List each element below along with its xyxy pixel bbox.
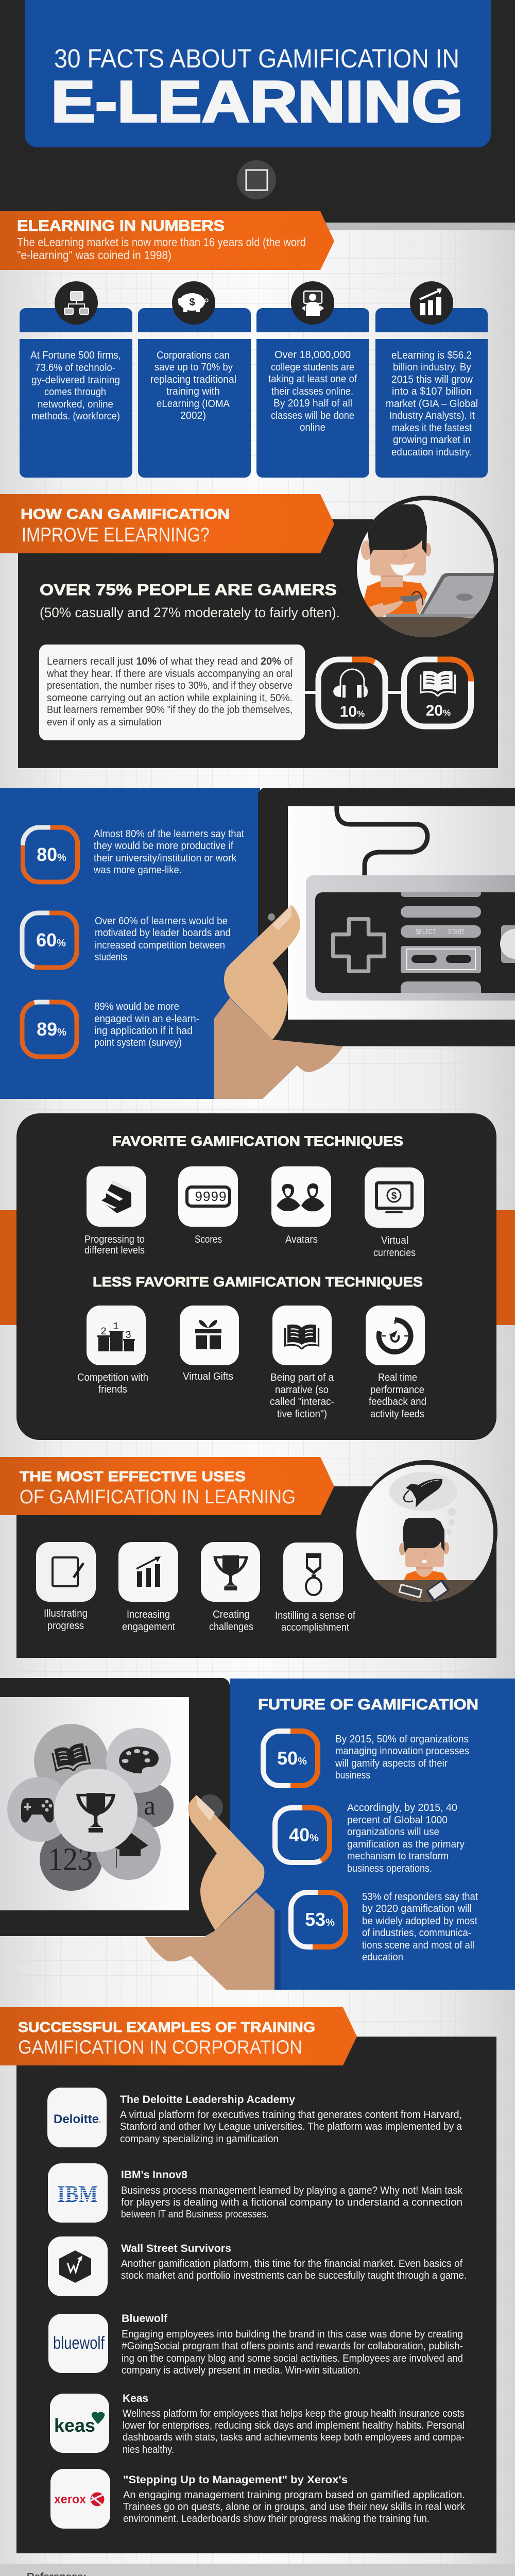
ring: 10 percent headphones: 10% [340, 703, 365, 720]
card: corporations save: training with [166, 386, 220, 397]
use: illustrating progress: progress [47, 1620, 84, 1632]
text: 89 percent [94, 1001, 199, 1048]
technique: competition: 3 [125, 1330, 131, 1342]
example: Xerox: An engaging management training program based on gamified application. [123, 2489, 465, 2501]
card: market size: eLearning is $56.2 [391, 350, 472, 361]
example: Bluewolf: Engaging employees into building the brand in this case was done by creating [122, 2329, 463, 2340]
heading: less favorite techniques: LESS FAVORITE GAMIFICATION TECHNIQUES [93, 1274, 423, 1290]
card: college students: By 2019 half of all [273, 398, 352, 409]
text: 80 percent: they would be more productive if [94, 840, 233, 852]
bubble: book [34, 1724, 108, 1798]
technique: narrative: called "interac- [270, 1396, 334, 1408]
example: Keas: lower for enterprises, reducing sick days and implement healthy habits. Personal [123, 2420, 465, 2431]
text: 80 percent [93, 828, 244, 876]
card: corporations save: Corporations can [157, 350, 230, 361]
card: college students: online [300, 422, 325, 433]
text: 40 percent: business operations. [347, 1863, 432, 1874]
technique: virtual currencies: currencies [373, 1247, 416, 1259]
example: Keas: nies healthy. [123, 2444, 174, 2455]
card: corporations save: save up to 70% by [154, 362, 233, 373]
orange band behind techniques panel [0, 1210, 515, 1325]
card: college students: taking at least one of [268, 374, 357, 385]
example: Xerox: Trainees go on quests, alone or in groups, and use their new skills in real work [123, 2501, 466, 2513]
banner: most effective uses [0, 1457, 334, 1515]
heading: future: FUTURE OF GAMIFICATION [258, 1697, 478, 1713]
ring: 20 percent book: 20% [426, 702, 451, 719]
stat: over 75 percent gamers: (50% casually and 27% moderately to fairly often). [40, 605, 340, 620]
cable [337, 806, 427, 875]
banner: how can gamification [0, 494, 334, 553]
example: Deloitte: Stanford and other Ivy League universities. The platform was implemented by a [120, 2121, 462, 2132]
use: creating challenges [201, 1542, 260, 1633]
technique: feedback: Real time [378, 1372, 417, 1383]
controller body: SELECT [416, 927, 436, 936]
card: corporations save: replacing traditional [150, 374, 236, 385]
example: Deloitte: company specializing in gamification [120, 2133, 279, 2145]
technique: scores [178, 1166, 238, 1245]
card: college students: classes will be done [271, 410, 354, 421]
text box: recall [39, 645, 305, 740]
panel: techniques [16, 1113, 496, 1440]
card: fortune 500: At Fortune 500 firms, [30, 350, 121, 361]
use: increasing engagement [118, 1542, 178, 1633]
ring: 53 percent [291, 1892, 346, 1947]
text: 50 percent: will gamify aspects of their [335, 1758, 448, 1769]
ring: 50 percent: 50% [277, 1748, 307, 1769]
illustration: gamer with laptop [355, 496, 500, 640]
text: 89 percent: engaged win an e-learn- [94, 1013, 199, 1025]
text box: recall: presentation, the number rises to 30%, and if they observe [47, 680, 293, 691]
header tablet [0, 0, 515, 223]
card: market size: Industry Analysts). It [389, 410, 475, 421]
ring: 40 percent: 40% [289, 1824, 319, 1845]
example: Bluewolf: ing on the company blog and some social activities. Employees are involved and [122, 2353, 463, 2364]
ring: 80 percent [23, 827, 77, 882]
text: 80 percent: was more game-like. [93, 865, 182, 876]
example: Wall Street Survivors [48, 2236, 467, 2296]
icon: network [55, 281, 98, 325]
tablet screen [25, 0, 491, 147]
heading: favorite techniques: FAVORITE GAMIFICATION TECHNIQUES [112, 1133, 403, 1149]
text: 89 percent: point system (survey) [94, 1037, 182, 1048]
card: fortune 500: methods. (workforce) [31, 411, 120, 422]
technique: feedback: feedback and [369, 1396, 426, 1408]
illustration: thinking character [355, 1460, 500, 1603]
text: 53 percent: education [362, 1952, 403, 1963]
text box: recall: Learners recall just 10% of what they read and 20% of [47, 656, 293, 667]
use: increasing engagement: engagement [122, 1621, 175, 1633]
technique: competition: Competition with [77, 1372, 148, 1383]
banner: most effective uses: OF GAMIFICATION IN LEARNING [20, 1486, 296, 1508]
card: market size: growing market in [393, 434, 471, 446]
icon: piggy bank: $ [189, 297, 195, 308]
card: market size [375, 281, 488, 478]
bubble: trophy [54, 1769, 138, 1852]
example: Keas: keas [54, 2415, 95, 2436]
use: creating challenges: challenges [209, 1621, 253, 1633]
text box: recall: what they hear. If there are visuals accompanying an oral [46, 668, 293, 680]
bubble: game controller [7, 1777, 72, 1842]
card: corporations save [138, 281, 251, 478]
card: market size: education industry. [391, 447, 472, 458]
card: corporations save: 2002) [180, 410, 206, 421]
ring: 20 percent book [388, 659, 471, 726]
example: Wall Street Survivors: Another gamification platform, this time for the financial market. Even basics of [121, 2258, 462, 2269]
example: Deloitte: The Deloitte Leadership Academy [120, 2094, 295, 2106]
example: Xerox: environment. Leaderboards show their progress making the training fun. [123, 2513, 430, 2524]
card: fortune 500: comes through [44, 386, 106, 398]
use: illustrating progress: Illustrating [44, 1608, 88, 1619]
text: 89 percent: ing application if it had [94, 1025, 193, 1037]
card: fortune 500: networked, online [38, 399, 113, 410]
example: Xerox: xerox [54, 2493, 87, 2506]
banner: successful examples: GAMIFICATION IN CORPORATION [18, 2037, 302, 2058]
banner: eLearning in numbers: ELEARNING IN NUMBERS [17, 217, 225, 234]
card: fortune 500: 73.6% of technolo- [35, 362, 115, 374]
text: 53 percent: tions scene and most of all [362, 1940, 474, 1951]
card: college students [256, 281, 369, 478]
text: 40 percent: mechanism to transform [347, 1851, 449, 1862]
bubble: letter a [129, 1783, 174, 1827]
text: 50 percent [335, 1734, 469, 1781]
text: 89 percent: 89% would be more [94, 1001, 179, 1012]
text box: recall: someone carrying out an action while explaining it, 50%. [47, 692, 293, 704]
controller body [306, 875, 515, 1001]
ring: 50 percent [263, 1731, 318, 1786]
example: Keas: Wellness platform for employees that helps keep the group health insurance costs [123, 2408, 465, 2419]
technique: virtual gifts [180, 1306, 239, 1382]
panel: most effective uses [16, 1460, 500, 1658]
example: IBM: between IT and Business processes. [121, 2209, 269, 2220]
bubble: graduation cap [96, 1815, 161, 1880]
text: 53 percent: 53% of responders say that [362, 1891, 478, 1903]
bubble: numbers: 123 [48, 1841, 93, 1877]
icon: growth chart [410, 281, 453, 325]
example: IBM: Business process management learned by playing a game? Why not! Main task [121, 2185, 463, 2196]
text: 60 percent: motivated by leader boards and [95, 927, 231, 939]
technique: competition [77, 1306, 148, 1395]
text: 40 percent: gamification as the primary [347, 1839, 465, 1850]
banner: eLearning in numbers [0, 211, 334, 270]
technique: levels [84, 1166, 146, 1256]
example: Bluewolf: #GoingSocial program that offers points and rewards for collaboration, publish- [122, 2341, 463, 2352]
example: Wall Street Survivors: stock market and portfolio investments can be succesfully taught through a game. [121, 2270, 467, 2281]
technique: feedback: performance [370, 1384, 424, 1396]
ring: 40 percent [275, 1808, 330, 1862]
card: fortune 500: gy-delivered training [31, 375, 120, 386]
example: Deloitte [47, 2088, 462, 2147]
example: Bluewolf: Bluewolf [122, 2313, 168, 2325]
example: Deloitte: A virtual platform for executives training that generates content from Harvard, [120, 2109, 462, 2121]
example: Deloitte: Deloitte [54, 2112, 99, 2126]
text: 50 percent: business [335, 1770, 370, 1781]
card: market size: 2015 this will grow [391, 374, 473, 385]
use: sense of accomplishment: Instilling a sense of [275, 1610, 355, 1621]
illustration: hand holding tablet [145, 1795, 274, 1990]
example: Xerox [50, 2469, 466, 2529]
ring: 10 percent headphones [305, 659, 385, 726]
title [51, 44, 463, 134]
text: 40 percent [347, 1802, 465, 1874]
technique: competition: 1 [113, 1321, 119, 1333]
example: Bluewolf: company is actively present in media. Win-win situation. [122, 2365, 361, 2376]
text: 40 percent: organizations will use [347, 1826, 439, 1838]
example: Bluewolf [48, 2313, 463, 2376]
technique: narrative: Being part of a [270, 1372, 334, 1383]
bubble: numbers [40, 1828, 102, 1891]
use: increasing engagement: Increasing [127, 1609, 170, 1620]
text: 80 percent: Almost 80% of the learners say that [94, 828, 244, 840]
ring: 60 percent [22, 913, 77, 968]
technique: levels: Progressing to [84, 1234, 145, 1245]
card: market size: into a $107 billion [392, 386, 472, 397]
ring: 89 percent [22, 1002, 77, 1057]
technique: levels: different levels [84, 1245, 145, 1256]
technique: narrative: narrative (so [275, 1384, 329, 1396]
text: 40 percent: percent of Global 1000 [347, 1815, 448, 1826]
card: college students: Over 18,000,000 [274, 349, 351, 361]
banner: how can gamification: HOW CAN GAMIFICATION [21, 506, 230, 522]
illustration: tablet with game controller [258, 788, 515, 1046]
technique: avatars [271, 1166, 331, 1245]
text: 60 percent: students [95, 952, 127, 963]
example: IBM [48, 2163, 463, 2223]
card: corporations save: eLearning (IOMA [157, 398, 230, 410]
bubble: palette [106, 1728, 171, 1793]
text: 53 percent: by 2020 gamification will [362, 1903, 472, 1914]
technique: feedback [366, 1306, 426, 1420]
text: 60 percent [95, 916, 231, 963]
example: Keas [50, 2393, 465, 2455]
example: Xerox: "Stepping Up to Management" by Xerox's [123, 2474, 348, 2486]
technique: virtual currencies: $ [391, 1191, 397, 1201]
icon: online student [291, 281, 334, 325]
footer: references [0, 2564, 515, 2576]
example: IBM: IBM's Innov8 [121, 2169, 187, 2181]
card: market size: market (GIA – Global [386, 398, 478, 410]
text: 60 percent: Over 60% of learners would be [95, 916, 228, 927]
ring: 89 percent: 89% [37, 1019, 66, 1040]
example: Wall Street Survivors: Wall Street Survivors [121, 2243, 231, 2255]
text: 53 percent [362, 1891, 478, 1963]
technique: avatars: Avatars [285, 1234, 318, 1245]
technique: competition: 2 [100, 1326, 107, 1338]
text: 53 percent: be widely adopted by most [362, 1916, 477, 1927]
text: 50 percent: managing innovation processes [335, 1745, 469, 1757]
text box: recall: But learners remember 90% "if they do the job themselves, [47, 704, 293, 716]
stat: over 75 percent gamers [40, 581, 340, 620]
ring: 53 percent: 53% [305, 1909, 335, 1930]
banner: successful examples [0, 2007, 357, 2065]
icon: piggy bank [172, 281, 215, 325]
card: college students: their classes online. [271, 386, 353, 397]
banner: eLearning in numbers: "e-learning" was coined in 1998) [17, 248, 171, 262]
banner: eLearning in numbers: The eLearning market is now more than 16 years old (the word [17, 235, 306, 249]
technique: narrative [270, 1306, 334, 1420]
title: 30 FACTS ABOUT GAMIFICATION IN [54, 44, 459, 73]
card: college students: college students are [271, 362, 354, 373]
technique: scores: 9999 [195, 1190, 227, 1206]
technique: narrative: tive fiction") [277, 1409, 327, 1420]
use: sense of accomplishment [275, 1543, 355, 1633]
technique: feedback: activity feeds [370, 1409, 424, 1420]
banner: successful examples: SUCCESSFUL EXAMPLES OF TRAINING [18, 2019, 315, 2035]
panel: how can gamification improve elearning [18, 496, 500, 768]
text: 40 percent: Accordingly, by 2015, 40 [347, 1802, 457, 1814]
example: Bluewolf: bluewolf [53, 2333, 105, 2353]
technique: scores: Scores [195, 1234, 222, 1245]
text box: recall: even if only as a simulation [47, 717, 162, 728]
ring: 80 percent: 80% [37, 844, 66, 865]
home button [237, 160, 276, 199]
text: 53 percent: of industries, communica- [362, 1927, 471, 1939]
title: E-LEARNING [51, 69, 463, 134]
panel: future of gamification [230, 1679, 515, 1990]
technique: virtual gifts: Virtual Gifts [183, 1371, 233, 1382]
text: 80 percent: their university/institution or work [94, 853, 237, 864]
card: fortune 500 [20, 281, 132, 478]
illustration: hand holding tablet [214, 905, 343, 1099]
banner: how can gamification: IMPROVE ELEARNING? [22, 524, 210, 546]
stat: over 75 percent gamers: OVER 75% PEOPLE ARE GAMERS [40, 581, 337, 599]
banner: most effective uses: THE MOST EFFECTIVE USES [20, 1468, 246, 1484]
illustration: tablet with learning bubbles [0, 1678, 230, 1936]
example: Keas: Keas [123, 2393, 148, 2404]
example: IBM: IBM [57, 2181, 98, 2208]
use: illustrating progress [36, 1542, 96, 1632]
ring: 60 percent: 60% [36, 929, 66, 951]
use: sense of accomplishment: accomplishment [281, 1622, 349, 1633]
panel: successful examples [16, 2037, 496, 2553]
bubble: letter a: a [144, 1791, 156, 1821]
technique: virtual currencies: Virtual [381, 1235, 408, 1246]
example: Keas: dashboards with stats, tasks and achievments keep both employees and compa- [123, 2432, 465, 2443]
example: IBM: for players is dealing with a fictional company to understand a connection [121, 2197, 462, 2208]
text: 50 percent: By 2015, 50% of organizations [335, 1734, 469, 1745]
card: market size: makes it the fastest [392, 422, 472, 434]
technique: competition: friends [98, 1384, 127, 1395]
text: 60 percent: increased competition between [95, 940, 225, 951]
controller body: START [448, 927, 465, 936]
technique: virtual currencies [365, 1167, 424, 1259]
card: market size: billion industry. By [393, 362, 471, 373]
home button [268, 913, 275, 921]
use: creating challenges: Creating [213, 1609, 250, 1620]
panel: blue stats section [0, 788, 260, 1099]
